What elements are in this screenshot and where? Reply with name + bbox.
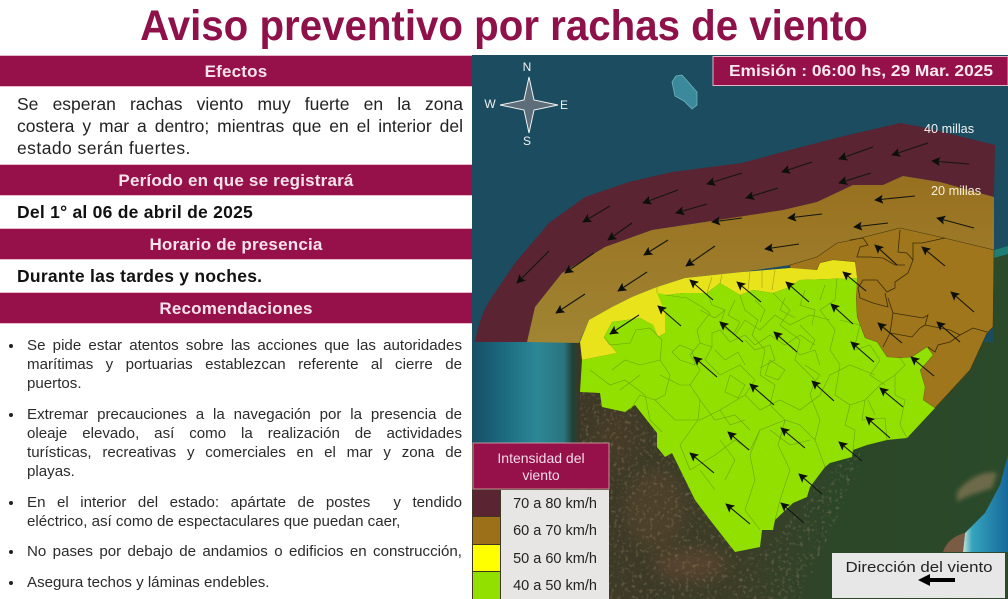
emission date box: Emisión : 06:00 hs, 29 Mar. 2025 [729, 63, 993, 80]
text block: recomendaciones list: puertos. [27, 375, 82, 392]
legend: wind intensity: viento [522, 467, 560, 483]
legend row: 40 a 50 km/h [473, 572, 597, 599]
text block: recomendaciones list: Se pide estar atentos sobre las acciones que las autoridades [27, 337, 462, 354]
text block: efectos: Se esperan rachas viento muy fuerte en la zona [17, 94, 463, 114]
text block: recomendaciones list: eléctrico, así como de espectaculares que puedan caer, [27, 513, 400, 530]
background: west coastal water [473, 342, 580, 444]
label: 20 millas: 20 millas [931, 184, 981, 198]
wind direction key: Dirección del viento [846, 559, 992, 576]
panel: horario heading [0, 228, 472, 260]
region: yellow [580, 260, 857, 360]
text block: recomendaciones list: En el interior del estado: apártate de postes y tendido [27, 494, 462, 511]
legend row: 60 a 70 km/h: 60 a 70 km/h [513, 523, 597, 539]
band: 60 a 70 km/h [527, 176, 994, 343]
panel: horario heading: Horario de presencia [149, 235, 323, 254]
panel: recomendaciones heading [0, 292, 472, 324]
legend row: 70 a 80 km/h: 70 a 80 km/h [513, 496, 597, 512]
brown interior boundaries [850, 230, 987, 352]
panel: efectos heading [0, 55, 472, 87]
text block: recomendaciones list: turísticas, recreativas y comerciales en el mar y zona de [27, 444, 462, 461]
legend row: 50 a 60 km/h: 50 a 60 km/h [513, 551, 597, 567]
map [472, 55, 1008, 599]
yellow subdivisions [657, 270, 775, 293]
panel: periodo heading: Período en que se registrará [118, 171, 354, 190]
legend row: 70 a 80 km/h [473, 490, 597, 516]
panel: periodo heading [0, 164, 472, 196]
island [672, 75, 697, 109]
text block: recomendaciones list [9, 337, 462, 591]
region: green [580, 278, 935, 552]
text block: recomendaciones list: Asegura techos y láminas endebles. [27, 574, 269, 591]
icon: compass rose: E [560, 98, 568, 112]
text block: efectos: costera y mar a dentro; mientras que en el interior del [17, 116, 463, 136]
legend: wind intensity [473, 443, 609, 599]
legend: wind intensity: Intensidad del [497, 450, 585, 466]
text block: recomendaciones list: Extremar precauciones a la navegación por la presencia de [27, 406, 462, 423]
icon: compass rose: W [484, 97, 496, 111]
text block: recomendaciones list: playas. [27, 463, 75, 480]
icon: compass rose: S [523, 134, 531, 148]
text block: recomendaciones list: No pases por debajo de andamios o edificios en construcción, [27, 543, 462, 560]
emission date box [713, 56, 1008, 86]
text block: efectos [17, 94, 463, 158]
title: Aviso preventivo por rachas de viento [140, 2, 868, 50]
legend row: 40 a 50 km/h: 40 a 50 km/h [513, 578, 597, 594]
legend row: 50 a 60 km/h [473, 545, 597, 571]
background: land [472, 246, 1008, 599]
background: sea [472, 55, 1008, 599]
text block: efectos: estado serán fuertes. [17, 138, 191, 158]
panel: efectos heading: Efectos [205, 62, 267, 81]
wind direction key [832, 553, 1005, 598]
legend row: 60 a 70 km/h [473, 517, 597, 544]
region: brown interior [790, 228, 994, 408]
text: horario: Durante las tardes y noches. [17, 266, 262, 286]
wind arrows [517, 143, 974, 524]
background: southeast coast water [943, 455, 1008, 552]
text block: recomendaciones list: oleaje elevado, así como la realización de actividades [27, 425, 462, 442]
municipal boundaries [590, 278, 907, 530]
text block: recomendaciones list: marítimas y portuarias establezcan referente al cierre de [27, 356, 462, 373]
label: 40 millas: 40 millas [924, 122, 974, 136]
icon: compass rose [484, 60, 568, 148]
text: periodo: Del 1° al 06 de abril de 2025 [17, 202, 253, 222]
background: east sea strip [994, 246, 1008, 258]
panel: recomendaciones heading: Recomendaciones [159, 299, 313, 318]
icon: compass rose: N [523, 60, 531, 74]
band: 70 a 80 km/h [475, 123, 995, 342]
